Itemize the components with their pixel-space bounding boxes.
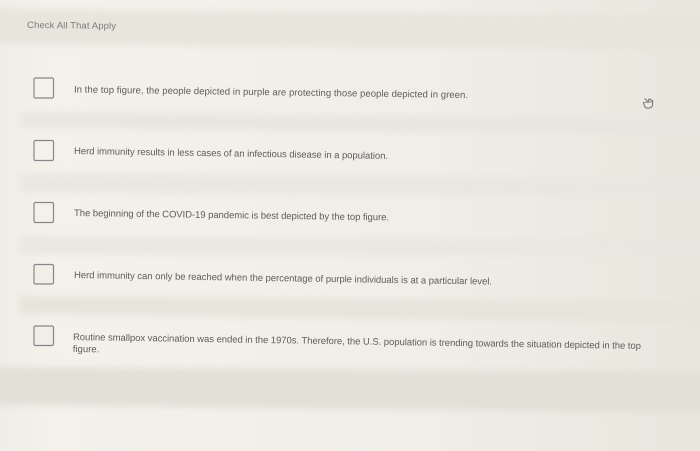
icon: cursor hand [643, 98, 653, 108]
option 4 text: Herd immunity can only be reached when the percentage of purple individuals is at a particular level. [74, 270, 492, 288]
option 2 [34, 140, 388, 162]
option 3 text: The beginning of the COVID-19 pandemic is best depicted by the top figure. [74, 208, 389, 223]
option 3 [34, 202, 389, 223]
checkbox 5 [34, 326, 54, 346]
option 5 [34, 326, 641, 364]
checkbox 4 [34, 264, 54, 284]
option 5 text: Routine smallpox vaccination was ended in the 1970s. Therefore, the U.S. population is trending towards the situation depicted in the top [73, 332, 641, 352]
checkbox 1 [34, 78, 54, 98]
option 1 text: In the top figure, the people depicted in purple are protecting those people depicted in green. [74, 85, 468, 101]
checkbox 2 [34, 140, 54, 160]
option 4 [34, 264, 492, 288]
heading: Check All That Apply [27, 20, 116, 32]
option 5 text: figure. [73, 344, 99, 355]
option 2 text: Herd immunity results in less cases of an infectious disease in a population. [74, 146, 388, 162]
checkbox 3 [34, 202, 54, 222]
option 1 [34, 78, 468, 101]
